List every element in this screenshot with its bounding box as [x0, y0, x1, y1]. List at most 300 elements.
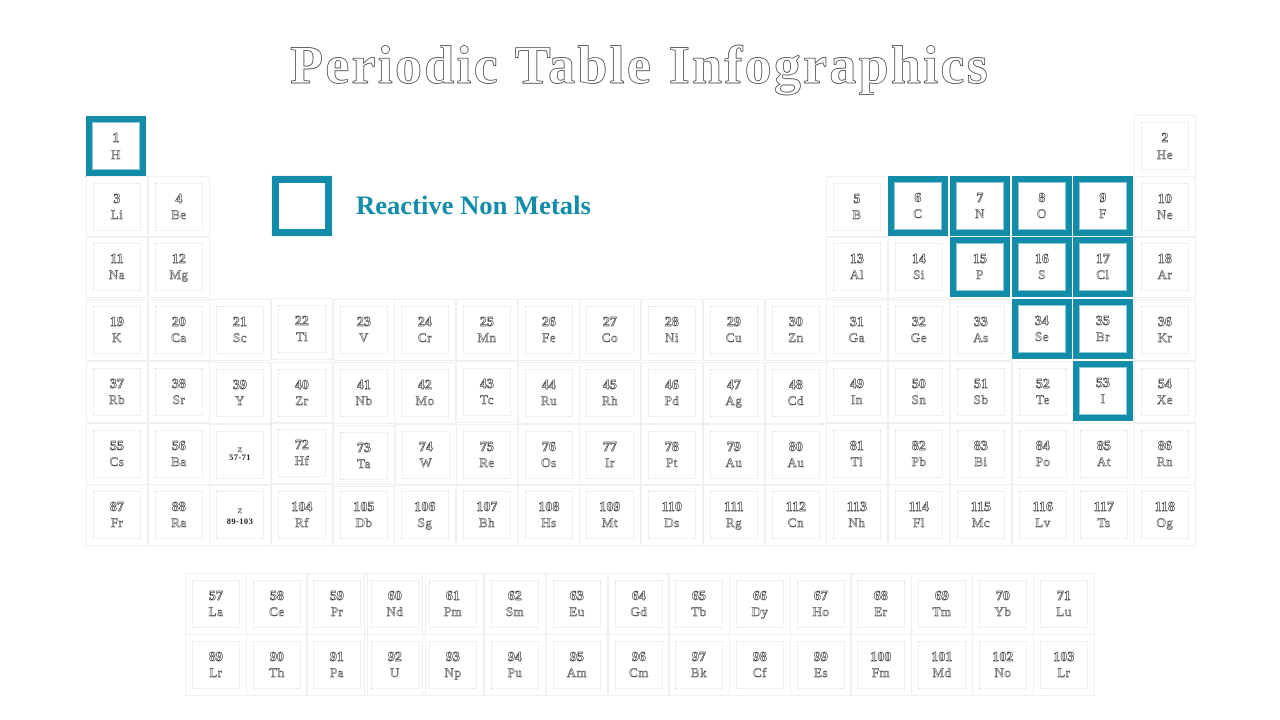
element: Hg: [765, 424, 827, 486]
element: Os: Os: [541, 455, 557, 470]
actinide placeholder: x: [238, 505, 242, 515]
element: At: At: [1097, 454, 1111, 469]
element: Fm: [850, 634, 912, 696]
element: Fl: 114: [909, 499, 929, 514]
element: Ce: 58: [270, 588, 284, 603]
actinide placeholder: 89-103: [227, 516, 253, 526]
element: Pu: Pu: [508, 665, 522, 680]
element: Y: 39: [233, 377, 247, 392]
element: Fe: Fe: [542, 330, 556, 345]
element: Be: Be: [171, 207, 187, 222]
element: Cd: 48: [789, 377, 803, 392]
element: Ni: Ni: [665, 330, 679, 345]
element: V: V: [359, 330, 369, 345]
element: Hf: [271, 422, 333, 484]
element: Ne: 10: [1158, 191, 1172, 206]
element: Am: Am: [567, 665, 587, 680]
element: Rg: Rg: [726, 515, 742, 530]
element: O: O: [1037, 206, 1047, 221]
element: Pr: Pr: [331, 604, 343, 619]
element: Cs: 55: [110, 438, 124, 453]
element: No: [972, 634, 1034, 696]
element: Ge: [888, 299, 950, 361]
element: Nh: 113: [847, 499, 867, 514]
lanthanide placeholder: x: [238, 444, 242, 454]
element: Mt: [579, 484, 641, 546]
element: Ta: Ta: [357, 456, 371, 471]
element: Ds: 110: [662, 499, 682, 514]
element: Th: Th: [269, 665, 285, 680]
element: Re: [456, 424, 518, 486]
element: Au: 79: [727, 439, 741, 454]
element: Th: [246, 634, 308, 696]
element: Hf: Hf: [295, 453, 309, 468]
element: Tc: Tc: [480, 392, 494, 407]
element: W: 74: [419, 439, 433, 454]
element: V: 23: [357, 314, 371, 329]
element: Es: [790, 634, 852, 696]
element: Cn: [765, 484, 827, 546]
lanthanide placeholder: 57-71: [229, 452, 251, 462]
element: Ru: 44: [542, 377, 556, 392]
element: Ce: [246, 573, 308, 635]
element: As: [950, 299, 1012, 361]
element: K: 19: [110, 314, 124, 329]
element: Bi: Bi: [974, 454, 988, 469]
element: Bh: [456, 484, 518, 546]
element: Rb: Rb: [109, 392, 125, 407]
element: Cs: Cs: [110, 454, 124, 469]
element: Sc: Sc: [233, 330, 247, 345]
element: Mo: 42: [418, 377, 432, 392]
element: Tl: Tl: [851, 454, 863, 469]
element: Lu: Lu: [1056, 604, 1072, 619]
element: Ag: 47: [727, 377, 741, 392]
element: Cm: Cm: [629, 665, 649, 680]
element: Md: Md: [932, 665, 952, 680]
element: N: 7: [976, 190, 984, 205]
element: Pd: [641, 362, 703, 424]
element: Tl: 81: [850, 438, 864, 453]
element: Al: [826, 236, 888, 298]
element: U: U: [390, 665, 400, 680]
element: B: 5: [853, 191, 861, 206]
element: Tm: Tm: [932, 604, 952, 619]
element: Pb: [888, 423, 950, 485]
element: In: 49: [850, 376, 864, 391]
element: Dy: [729, 573, 791, 635]
element: Ca: Ca: [171, 330, 187, 345]
element: Db: 105: [353, 499, 375, 514]
element: Np: Np: [445, 665, 461, 680]
element: Ac: Lr: [209, 665, 223, 680]
element: Nh: Nh: [849, 515, 865, 530]
element: Rf: Rf: [295, 515, 309, 530]
element: Al: 13: [850, 251, 864, 266]
element: Pu: 94: [508, 649, 522, 664]
element: Ru: Ru: [541, 393, 557, 408]
element: Y: Y: [235, 393, 245, 408]
element: Re: 75: [480, 439, 494, 454]
legend label: Reactive Non Metals: [356, 190, 591, 220]
element: Rg: [703, 484, 765, 546]
element: Ts: Ts: [1097, 515, 1111, 530]
element: K: [86, 299, 148, 361]
element: As: 33: [974, 314, 988, 329]
element: Pm: [422, 573, 484, 635]
element: V: [333, 299, 395, 361]
element: Xe: Xe: [1157, 392, 1173, 407]
element: Pt: 78: [665, 439, 679, 454]
element: Cd: Cd: [788, 393, 804, 408]
element: Sc: [209, 299, 271, 361]
element: Mt: Mt: [602, 515, 618, 530]
element: Lu: [1033, 573, 1095, 635]
element: Rn: [1134, 423, 1196, 485]
element: Mn: 25: [480, 314, 494, 329]
element: Os: 76: [542, 439, 556, 454]
element: P: [949, 236, 1011, 298]
element: Ta: 73: [357, 440, 371, 455]
element: Ga: Ga: [849, 330, 865, 345]
element: Ni: [641, 299, 703, 361]
element: Ba: [148, 423, 210, 485]
element: Dy: Dy: [752, 604, 768, 619]
element: Db: Db: [356, 515, 372, 530]
element: Hs: Hs: [541, 515, 557, 530]
element: Pt: [641, 424, 703, 486]
element: Ti: [271, 298, 333, 360]
element: Na: Na: [109, 267, 125, 282]
element: Ce: Ce: [269, 604, 285, 619]
element: Mo: [394, 362, 456, 424]
element: P: P: [976, 267, 984, 282]
element: Po: 84: [1036, 438, 1050, 453]
element: Ac: [185, 634, 247, 696]
element: Fr: 87: [110, 499, 124, 514]
element: Sg: [394, 484, 456, 546]
element: C: 6: [914, 190, 922, 205]
element: Hg: 80: [789, 439, 803, 454]
element: Hs: 108: [538, 499, 560, 514]
element: Ho: [790, 573, 852, 635]
element: Be: [148, 176, 210, 238]
element: Cr: [394, 299, 456, 361]
element: Br: Br: [1096, 329, 1110, 344]
element: Ni: 28: [665, 314, 679, 329]
element: Sm: Sm: [506, 604, 524, 619]
element: Cr: Cr: [418, 330, 432, 345]
element: H: H: [111, 147, 121, 162]
element: W: W: [420, 455, 432, 470]
element: Es: Es: [814, 665, 828, 680]
element: Gd: [608, 573, 670, 635]
element: Sb: 51: [974, 376, 988, 391]
element: Re: Re: [479, 455, 495, 470]
element: Pr: 59: [330, 588, 344, 603]
element: Bh: 107: [476, 499, 498, 514]
element: Ir: [579, 424, 641, 486]
element: Gd: Gd: [631, 604, 647, 619]
element: Fm: 100: [870, 649, 892, 664]
element: Dy: 66: [753, 588, 767, 603]
element: Ag: Ag: [726, 393, 742, 408]
element: Cl: [1072, 236, 1134, 298]
element: Kr: 36: [1158, 314, 1172, 329]
element: Pu: [484, 634, 546, 696]
element: Rh: [579, 362, 641, 424]
element: Ra: [148, 484, 210, 546]
element: Lv: 116: [1033, 499, 1053, 514]
element: Kr: [1134, 299, 1196, 361]
element: Sg: Sg: [418, 515, 432, 530]
element: Sn: 50: [912, 376, 926, 391]
element: Cl: 17: [1096, 251, 1110, 266]
element: Rf: [271, 484, 333, 546]
element: B: [826, 176, 888, 238]
element: Na: [86, 236, 148, 298]
element: Sm: [484, 573, 546, 635]
element: S: 16: [1035, 251, 1049, 266]
element: Au: Au: [726, 455, 742, 470]
element: Br: 35: [1096, 313, 1110, 328]
element: Ts: [1073, 484, 1135, 546]
element: Bk: Bk: [691, 665, 707, 680]
element: Ra: Ra: [171, 515, 187, 530]
element: Nd: 60: [388, 588, 402, 603]
element: Cm: 96: [632, 649, 646, 664]
element: Hf: 72: [295, 437, 309, 452]
element: Br: [1072, 298, 1134, 360]
element: Cs: [86, 423, 148, 485]
element: Md: 101: [931, 649, 953, 664]
element: Cd: [765, 362, 827, 424]
element: Ga: 31: [850, 314, 864, 329]
element: I: I: [1101, 391, 1105, 406]
element: Sb: [950, 361, 1012, 423]
element: Xe: [1134, 361, 1196, 423]
element: I: 53: [1096, 375, 1110, 390]
element: Be: 4: [175, 191, 183, 206]
element: Co: Co: [602, 330, 618, 345]
element: C: C: [913, 206, 923, 221]
element: Rn: Rn: [1157, 454, 1173, 469]
element: Er: Er: [874, 604, 888, 619]
element: Tl: [826, 423, 888, 485]
element: H: [85, 115, 147, 177]
element: Ar: [1134, 236, 1196, 298]
element: No: 102: [992, 649, 1014, 664]
element: Cu: 29: [727, 314, 741, 329]
element: Og: [1134, 484, 1196, 546]
element: Si: [888, 236, 950, 298]
element: Pd: Pd: [665, 393, 679, 408]
element: U: [364, 634, 426, 696]
element: Sm: 62: [508, 588, 522, 603]
element: Xe: 54: [1158, 376, 1172, 391]
element: K: K: [112, 330, 122, 345]
element: Se: Se: [1035, 329, 1049, 344]
element: P: 15: [973, 251, 987, 266]
element: Lr: 103: [1053, 649, 1075, 664]
element: N: N: [975, 206, 985, 221]
element: Np: 93: [446, 649, 460, 664]
element: Ta: [333, 425, 395, 487]
element: Mg: [148, 236, 210, 298]
lanthanide placeholder: [209, 424, 271, 486]
element: Er: [850, 573, 912, 635]
element: Bk: 97: [692, 649, 706, 664]
element: Sr: 38: [172, 376, 186, 391]
element: Zr: [271, 362, 333, 424]
element: Ru: [518, 362, 580, 424]
element: Se: 34: [1035, 313, 1049, 328]
element: La: 57: [209, 588, 223, 603]
element: Co: 27: [603, 314, 617, 329]
element: Sg: 106: [414, 499, 436, 514]
element: Li: [86, 176, 148, 238]
element: Pa: [306, 634, 368, 696]
element: Sb: Sb: [974, 392, 988, 407]
element: F: [1072, 175, 1134, 237]
element: Rn: 86: [1158, 438, 1172, 453]
element: Bh: Bh: [479, 515, 495, 530]
element: Ar: 18: [1158, 251, 1172, 266]
element: Bi: [950, 423, 1012, 485]
element: Og: Og: [1157, 515, 1173, 530]
element: Zn: [765, 299, 827, 361]
element: Pa: Pa: [330, 665, 344, 680]
element: Sn: [888, 361, 950, 423]
element: O: 8: [1038, 190, 1046, 205]
element: C: [887, 175, 949, 237]
element: Lr: [1033, 634, 1095, 696]
element: Fe: 26: [542, 314, 556, 329]
element: Mg: Mg: [169, 267, 189, 282]
element: Eu: 63: [570, 588, 584, 603]
element: Ar: Ar: [1158, 267, 1172, 282]
element: Li: 3: [113, 191, 121, 206]
element: Rh: Rh: [602, 393, 618, 408]
element: Cf: 98: [753, 649, 767, 664]
title: Periodic Table Infographics: [290, 35, 990, 95]
element: Mg: 12: [172, 251, 186, 266]
element: Po: Po: [1036, 454, 1050, 469]
element: Pr: [306, 573, 368, 635]
element: Cu: Cu: [726, 330, 742, 345]
element: O: [1011, 175, 1073, 237]
element: H: 1: [112, 130, 120, 145]
element: La: La: [209, 604, 223, 619]
element: Mn: [456, 299, 518, 361]
element: Ge: 32: [912, 314, 926, 329]
element: Pt: Pt: [666, 455, 678, 470]
element: Am: 95: [570, 649, 584, 664]
element: Ne: Ne: [1157, 207, 1173, 222]
element: Am: [546, 634, 608, 696]
element: S: S: [1038, 267, 1046, 282]
element: Cr: 24: [418, 314, 432, 329]
element: Nd: [364, 573, 426, 635]
element: Lv: Lv: [1035, 515, 1051, 530]
element: Cn: Cn: [788, 515, 804, 530]
element: Fr: [86, 484, 148, 546]
element: Mc: Mc: [972, 515, 990, 530]
element: Cf: [729, 634, 791, 696]
element: Fr: Fr: [111, 515, 123, 530]
element: At: 85: [1097, 438, 1111, 453]
element: Ca: [148, 299, 210, 361]
element: Ga: [826, 299, 888, 361]
element: Fl: [888, 484, 950, 546]
element: Cu: [703, 299, 765, 361]
element: Nh: [826, 484, 888, 546]
element: No: No: [995, 665, 1011, 680]
element: Rh: 45: [603, 377, 617, 392]
element: Rg: 111: [724, 499, 744, 514]
element: Pd: 46: [665, 377, 679, 392]
element: Ag: [703, 362, 765, 424]
element: Pa: 91: [330, 649, 344, 664]
element: Zr: 40: [295, 377, 309, 392]
element: Fm: Fm: [872, 665, 890, 680]
element: Pb: 82: [912, 438, 926, 453]
element: Ti: 22: [295, 313, 309, 328]
element: Nb: 41: [357, 377, 371, 392]
element: Zr: Zr: [295, 393, 309, 408]
actinide placeholder: [209, 484, 271, 546]
element: Cf: Cf: [753, 665, 767, 680]
element: Ds: [641, 484, 703, 546]
element: Gd: 64: [632, 588, 646, 603]
element: La: [185, 573, 247, 635]
element: Db: [333, 484, 395, 546]
element: Sc: 21: [233, 314, 247, 329]
element: Np: [422, 634, 484, 696]
element: Lr: Lr: [1057, 665, 1071, 680]
element: F: 9: [1099, 190, 1107, 205]
element: Og: 118: [1155, 499, 1175, 514]
element: B: B: [852, 207, 862, 222]
element: Mn: Mn: [477, 330, 497, 345]
element: Sn: Sn: [912, 392, 926, 407]
element: Cm: [608, 634, 670, 696]
element: Zn: Zn: [788, 330, 804, 345]
element: F: F: [1099, 206, 1107, 221]
element: Yb: Yb: [995, 604, 1011, 619]
element: Nb: Nb: [356, 393, 372, 408]
element: Zn: 30: [789, 314, 803, 329]
element: Eu: [546, 573, 608, 635]
element: Kr: Kr: [1158, 330, 1172, 345]
element: Ne: [1134, 176, 1196, 238]
element: Bi: 83: [974, 438, 988, 453]
element: N: [949, 175, 1011, 237]
element: Mc: 115: [971, 499, 991, 514]
element: He: He: [1157, 147, 1173, 162]
element: W: [395, 424, 457, 486]
element: Pm: 61: [446, 588, 460, 603]
element: Tm: [911, 573, 973, 635]
element: In: [826, 361, 888, 423]
element: Au: [703, 424, 765, 486]
element: Ir: Ir: [605, 455, 615, 470]
element: Ti: Ti: [296, 329, 308, 344]
element: Ho: 67: [814, 588, 828, 603]
element: Eu: Eu: [569, 604, 585, 619]
element: Hs: [518, 484, 580, 546]
element: Ge: Ge: [911, 330, 927, 345]
